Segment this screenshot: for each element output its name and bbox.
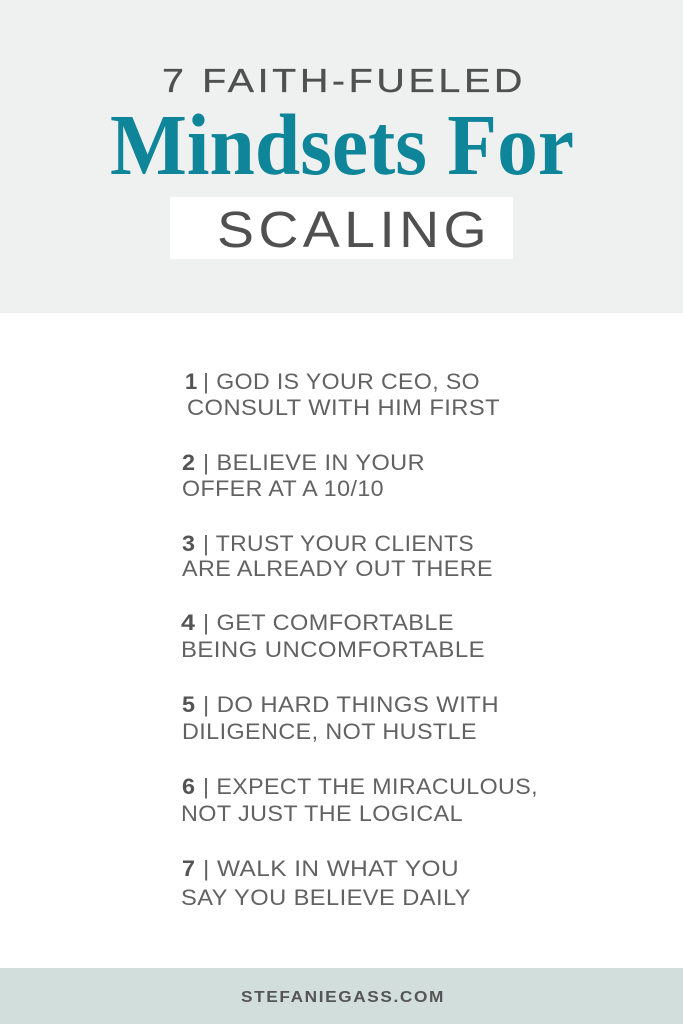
item 7: 7: [182, 856, 195, 881]
item 6: [181, 774, 538, 826]
item 5: 5: [182, 692, 195, 717]
item 2: [182, 450, 425, 501]
item 5: [182, 692, 499, 744]
item 1: 1: [185, 369, 197, 394]
panel: header: [0, 0, 683, 313]
item 2: OFFER AT A 10/10: [182, 476, 384, 501]
item 7: SAY YOU BELIEVE DAILY: [181, 885, 471, 910]
footer: [0, 968, 683, 1024]
heading: Scaling label: [170, 197, 513, 259]
item 7: | WALK IN WHAT YOU: [203, 856, 459, 881]
item 6: NOT JUST THE LOGICAL: [181, 801, 463, 826]
item 5: | DO HARD THINGS WITH: [203, 692, 499, 717]
item 3: 3: [182, 531, 195, 556]
item 1: CONSULT WITH HIM FIRST: [187, 395, 500, 420]
heading: Scaling label: SCALING: [217, 201, 491, 258]
item 3: [182, 531, 493, 581]
item 1: | GOD IS YOUR CEO, SO: [203, 369, 480, 394]
item 4: 4: [181, 610, 196, 635]
item 4: [181, 610, 485, 662]
item 3: | TRUST YOUR CLIENTS: [203, 531, 474, 556]
heading: 7 Faith-Fueled: 7 FAITH-FUELED: [162, 62, 526, 99]
item 6: 6: [182, 774, 195, 799]
item 5: DILIGENCE, NOT HUSTLE: [182, 719, 477, 744]
footer: STEFANIEGASS.COM: [241, 989, 445, 1006]
item 2: | BELIEVE IN YOUR: [203, 450, 425, 475]
item 7: [181, 856, 471, 910]
heading: Mindsets For: Mindsets For: [110, 96, 574, 193]
item 1: [185, 369, 500, 420]
item 6: | EXPECT THE MIRACULOUS,: [203, 774, 538, 799]
item 4: | GET COMFORTABLE: [203, 610, 454, 635]
item 4: BEING UNCOMFORTABLE: [181, 637, 485, 662]
panel: mindset list: [181, 369, 538, 910]
item 3: ARE ALREADY OUT THERE: [182, 556, 493, 581]
item 2: 2: [182, 450, 195, 475]
